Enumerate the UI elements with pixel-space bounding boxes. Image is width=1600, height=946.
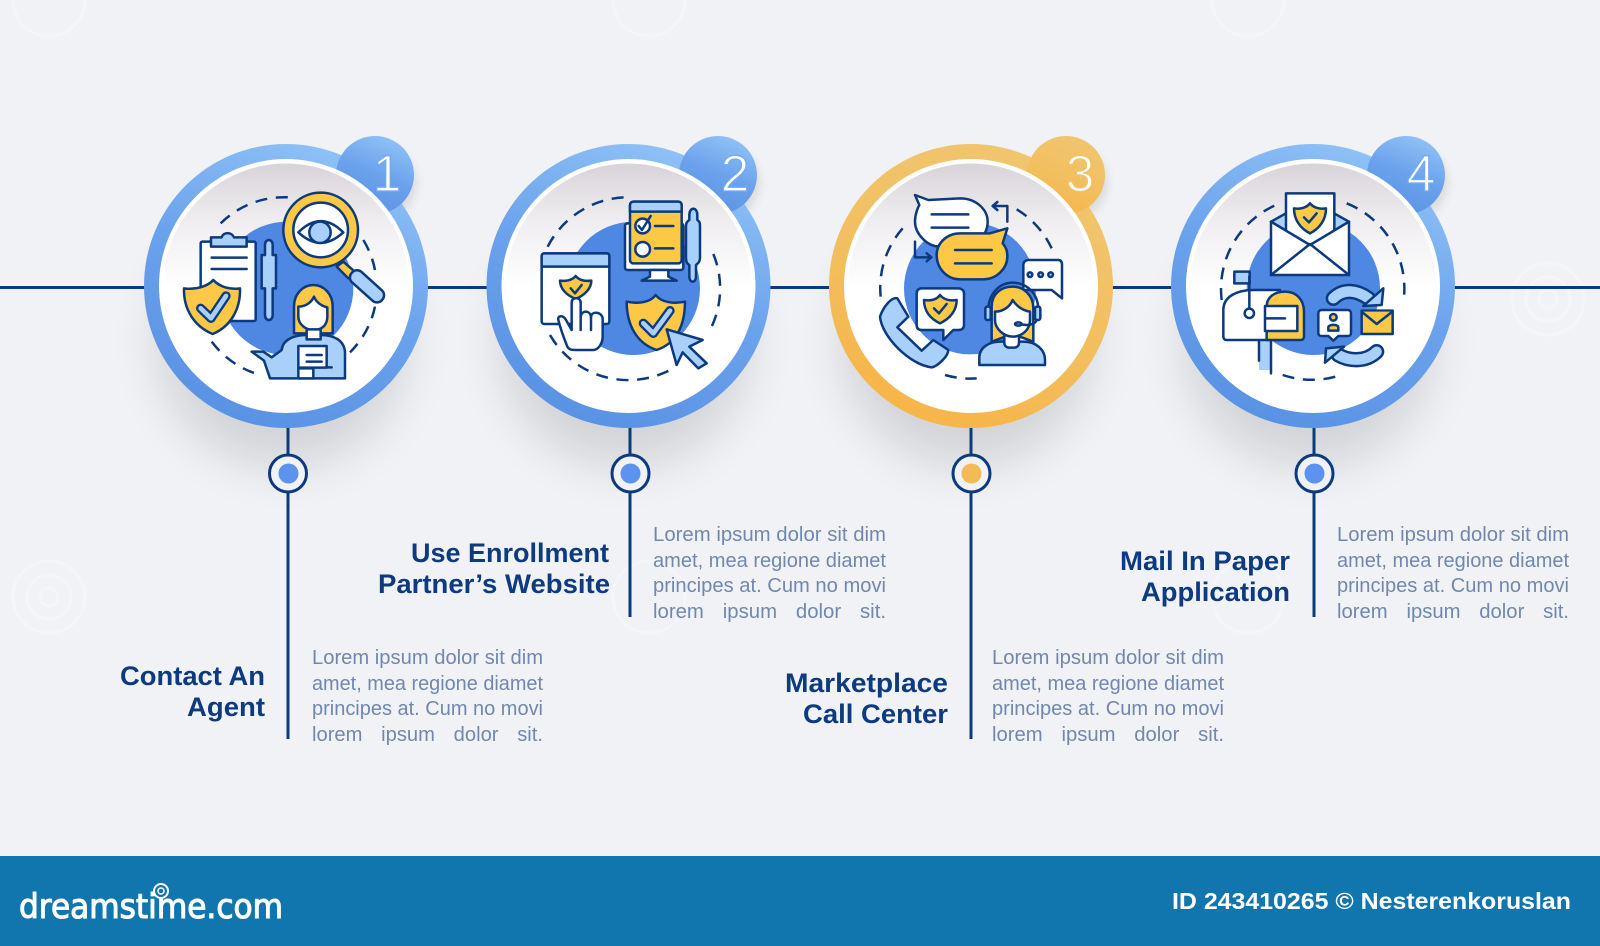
icon: agent, clipboard and magnifier xyxy=(184,193,387,378)
step 2 heading: Use Enrollment xyxy=(411,538,609,568)
step 1 body text: Lorem ipsum dolor sit dim xyxy=(312,647,543,669)
step 4 heading: Application xyxy=(1141,577,1290,607)
step 2 body text: amet, mea regione diamet xyxy=(653,550,886,572)
step 1 body text: principes at. Cum no movi xyxy=(312,698,543,720)
step 4 heading xyxy=(1120,546,1290,607)
step 2 heading xyxy=(378,538,610,599)
step 1 heading: Agent xyxy=(187,692,265,722)
step 4 connector xyxy=(1296,420,1333,617)
step 3 ring xyxy=(829,136,1113,428)
step 1 body text: lorem ipsum dolor sit. xyxy=(312,724,543,746)
step 2 body text: principes at. Cum no movi xyxy=(653,575,886,597)
step 1 number: 1 xyxy=(373,145,401,202)
step 4 body text: lorem ipsum dolor sit. xyxy=(1337,601,1569,623)
step 2 xyxy=(378,136,886,623)
step 4 number: 4 xyxy=(1407,145,1435,202)
step 3 heading xyxy=(785,668,948,729)
step 1 connector xyxy=(270,420,306,739)
step 2 heading: Partner’s Website xyxy=(378,569,610,599)
footer credit: ID 243410265 © Nesterenkoruslan xyxy=(1172,888,1571,914)
step 1 ring xyxy=(144,136,428,428)
step 4 body text: amet, mea regione diamet xyxy=(1337,550,1569,572)
step 1 xyxy=(120,136,543,746)
icon: website enrollment xyxy=(542,197,720,380)
step 2 connector xyxy=(612,420,649,617)
step 4 heading: Mail In Paper xyxy=(1120,546,1290,576)
step 3 body text: principes at. Cum no movi xyxy=(992,698,1224,720)
step 2 ring xyxy=(486,136,770,428)
step 1 heading xyxy=(120,661,265,722)
step 1 body text: amet, mea regione diamet xyxy=(312,673,543,695)
step 2 body text xyxy=(653,524,886,623)
step 3 body text: amet, mea regione diamet xyxy=(992,673,1224,695)
step 4 body text xyxy=(1337,524,1569,623)
step 3 body text: lorem ipsum dolor sit. xyxy=(992,724,1224,746)
footer logo: dreamstime.com xyxy=(19,887,283,927)
footer bar xyxy=(0,856,1600,946)
watermark marks xyxy=(13,0,1584,633)
step 3 connector xyxy=(953,420,990,739)
step 3 heading: Call Center xyxy=(803,699,948,729)
horizontal timeline xyxy=(0,286,1600,289)
step 3 number: 3 xyxy=(1066,145,1094,202)
step 1 heading: Contact An xyxy=(120,661,265,691)
step 1 body text xyxy=(312,647,543,746)
step 3 body text: Lorem ipsum dolor sit dim xyxy=(992,647,1224,669)
step 4 ring xyxy=(1171,136,1455,428)
step 3 body text xyxy=(992,647,1224,746)
step 2 body text: lorem ipsum dolor sit. xyxy=(653,601,886,623)
step 4 xyxy=(1120,136,1569,623)
step 4 body text: Lorem ipsum dolor sit dim xyxy=(1337,524,1569,546)
step 3 heading: Marketplace xyxy=(785,668,948,698)
step 2 number: 2 xyxy=(721,145,749,202)
step 4 body text: principes at. Cum no movi xyxy=(1337,575,1569,597)
step 2 body text: Lorem ipsum dolor sit dim xyxy=(653,524,886,546)
icon: paper mail xyxy=(1221,193,1404,380)
step 3 xyxy=(785,136,1224,746)
icon: call center xyxy=(880,195,1062,379)
